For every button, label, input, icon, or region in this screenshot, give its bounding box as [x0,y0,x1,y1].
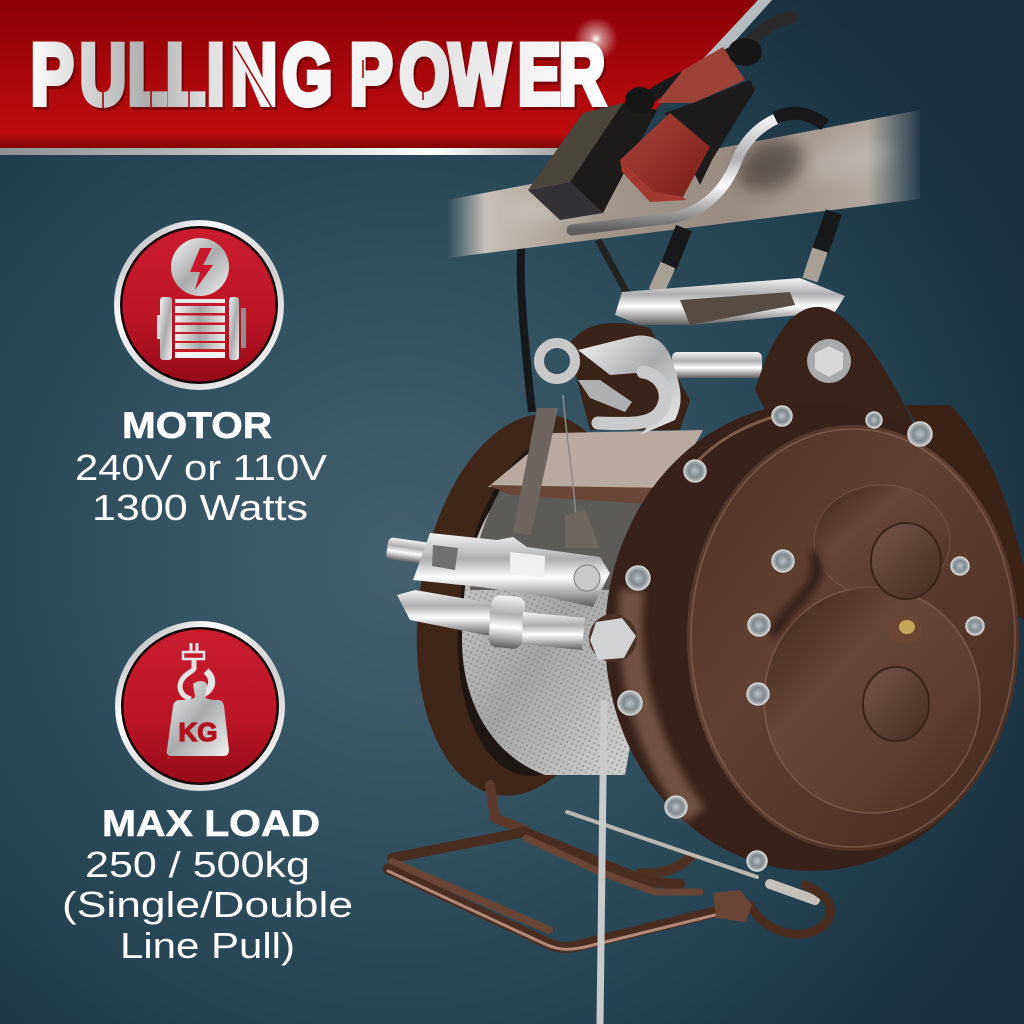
motor specification text: MOTOR [122,405,272,446]
chrome crossbar [672,352,762,378]
chrome clamp [386,533,637,662]
rear guard [905,405,1024,620]
lower pipe hangers [598,212,834,295]
upper chrome tube [572,118,778,230]
rope drum [462,490,640,775]
motor specification text: 240V or 110V [75,447,327,488]
max load specification text: MAX LOAD [102,803,320,844]
header banner [0,0,772,155]
icon: KG weight: KG [178,717,218,747]
rear cable loop [775,113,825,125]
mounting plate [615,278,845,325]
motor specification text [75,405,327,528]
max load specification text: Line Pull) [120,925,295,966]
flange bolts [618,406,984,871]
gearbox housing lobes [764,485,980,813]
front flange [605,403,1019,871]
chrome hook [598,372,665,424]
rear drum flange [393,400,657,810]
safety wire [563,395,577,540]
max load specification text [62,803,353,966]
shackle body [578,336,681,435]
max load icon [115,621,285,791]
control switch box [528,87,657,220]
base frame [388,785,830,949]
winch hoist illustration [386,17,1024,1024]
motor icon [114,220,284,390]
title: PULLING POWER [33,30,607,126]
grease nozzle [888,616,922,644]
shackle eye [539,343,575,379]
icon: electric motor [157,297,246,360]
hanger bracket [755,307,925,445]
red switch box [620,113,710,202]
shackle background [568,323,690,430]
support pipe [447,110,920,258]
top cover plate [488,430,703,490]
rear switch box [657,38,762,185]
front cover [687,425,1019,851]
motor specification text: 1300 Watts [92,487,308,528]
icon: lightning bolt badge [171,238,229,296]
max load specification text: (Single/Double [62,884,353,925]
hook latch [578,380,632,412]
icon: crane hook [180,643,212,699]
release lever [513,408,558,535]
max load specification text: 250 / 500kg [85,844,310,885]
limit switch tab [565,510,600,548]
title stencil cuts [103,46,423,108]
power cable [521,198,532,412]
gearbox caps [863,523,941,741]
icon: KG weight [167,681,229,756]
pendant cable [640,45,745,104]
wire rope [600,700,604,1024]
title: PULLING POWER [31,27,605,123]
